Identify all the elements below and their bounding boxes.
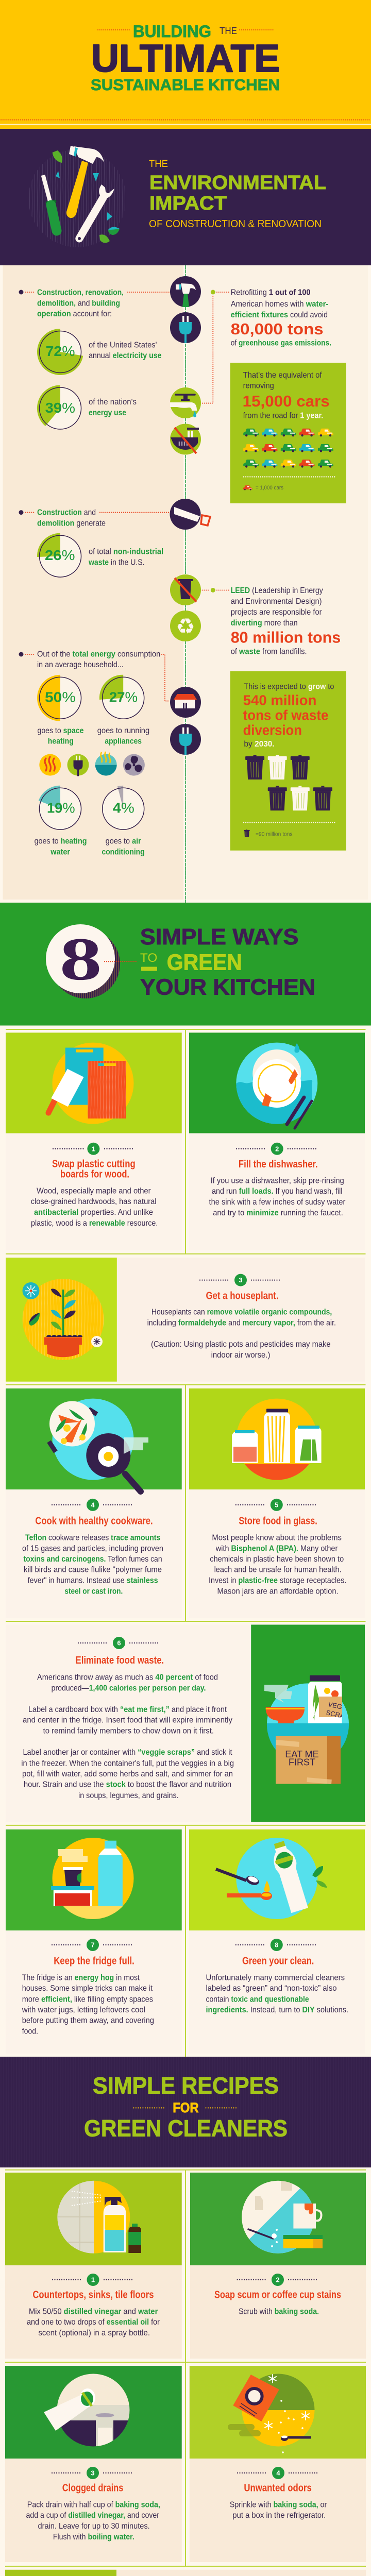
illustration: eat me first box: SCRAPS: [325, 1708, 354, 1722]
body text: Wood, especially maple and other: [37, 1187, 151, 1195]
pie chart: 72 percent: 72%: [46, 343, 75, 359]
pie chart: 26 percent: [37, 533, 81, 577]
callout: demolition waste: demolition generate: [37, 519, 106, 528]
body text: and center in the fridge. Insert food that will expire imminently: [23, 1716, 232, 1725]
body text: steel or cast iron.: [64, 1587, 123, 1596]
heading: Keep the fridge full.: [54, 1956, 134, 1967]
body text: and run full loads. If you hand wash, fill: [212, 1187, 342, 1196]
icon: house circle: [170, 687, 201, 718]
panel: environmental impact header: [0, 129, 371, 265]
body text: and try to minimize running the faucet.: [213, 1209, 343, 1217]
panel: eight ways list: [0, 1026, 371, 2057]
pie chart: 27 percent: 27%: [109, 689, 138, 705]
heading: for: FOR: [173, 2100, 199, 2115]
text: electricity use: [89, 341, 162, 360]
callout: demolition waste: [19, 509, 168, 528]
body text: and one to two drops of essential oil for: [27, 2318, 160, 2327]
title line: building the: BUILDING: [133, 22, 211, 41]
panel: 540 million tons: tons of waste: [243, 707, 328, 723]
callout: LEED projects: LEED (Leadership in Energy: [231, 586, 323, 595]
body text: Sprinkle with baking soda, or: [230, 2500, 327, 2509]
illustration: eat me first box: EAT ME: [285, 1749, 319, 1759]
panel: timeline statistics: [0, 265, 371, 903]
body text: with water jugs, letting leftovers cool: [22, 2006, 145, 2014]
icon: plug small: [67, 754, 89, 776]
illustration: plant: [23, 1279, 104, 1360]
title line: building the: THE: [220, 26, 237, 36]
panel: 15000 cars: That's the equivalent of: [243, 371, 322, 380]
panel: 540 million tons: diversion: [243, 722, 302, 738]
card: houseplant: [6, 1258, 365, 1382]
body text: houses. Some simple tricks can make it: [22, 1984, 153, 1993]
text: non-industrial waste: [88, 548, 163, 567]
number badge 3: [200, 1274, 281, 1286]
body text: add a cup of distilled vinegar, and cover: [26, 2511, 160, 2520]
illustration: eat me first box: [264, 1675, 355, 1784]
number badge 8: 8: [275, 1941, 278, 1949]
number badge 1: [53, 1143, 134, 1155]
body text: Mason jars are an affordable option.: [217, 1587, 339, 1596]
body text: [22, 1973, 154, 2036]
body text: The fridge is an energy hog in most: [22, 1973, 140, 1982]
number badge 4: 4: [276, 2469, 280, 2477]
callout: retrofitting homes: [203, 288, 331, 403]
heading: Soap scum or coffee cup stains: [214, 2290, 341, 2301]
callout: retrofitting homes: efficient fixtures could avoid: [231, 311, 328, 319]
pie chart: 39 percent: [37, 385, 81, 429]
body text: Most people know about the problems: [212, 1534, 342, 1543]
text: air conditioning: conditioning: [102, 848, 145, 856]
body text: kill birds and cause flulike "polymer fume: [24, 1566, 162, 1574]
illustration: mug and sponge: [240, 2179, 323, 2257]
callout: retrofitting homes: of greenhouse gas emissions.: [231, 338, 331, 347]
illustration: cleaning supplies: [216, 1838, 327, 1919]
panel: 540 million tons: by 2030.: [244, 740, 275, 749]
number badge 7: [52, 1939, 133, 1951]
body text: [22, 1534, 163, 1596]
text: energy use: of the nation's: [89, 398, 137, 406]
panel: 540 million tons: 540 million: [243, 692, 316, 708]
heading: Get a houseplant.: [206, 1291, 278, 1302]
body text: Americans throw away as much as 40 percent of food: [37, 1673, 218, 1682]
body text: put a box in the refrigerator.: [232, 2511, 326, 2520]
heading: your kitchen: YOUR KITCHEN: [140, 975, 315, 1000]
pie chart: 50 percent: 50%: [45, 689, 76, 705]
pie chart: 19 percent: [39, 786, 81, 829]
number badge 2: [237, 1143, 318, 1155]
body text: Houseplants can remove volatile organic compounds,: [151, 1308, 332, 1317]
illustration: plate and pan: [49, 1399, 148, 1492]
body text: [209, 1534, 346, 1596]
panel: recipes list: [0, 2167, 371, 2576]
text: energy use: [89, 398, 137, 417]
panel: 15000 cars: from the road for 1 year.: [243, 412, 323, 420]
body text: produced—1,400 calories per person per day.: [52, 1684, 206, 1693]
body text: hour. Strain and use the stock to boost the flavor and nutrition: [24, 1781, 231, 1789]
panel: 540 million tons: [230, 671, 346, 851]
number badge 7: 7: [91, 1941, 95, 1949]
legend: car: = 1,000 cars: [256, 485, 283, 491]
heading: simple recipes: SIMPLE RECIPES: [93, 2072, 279, 2098]
body text: food.: [22, 2027, 38, 2036]
heading: Cook with healthy cookware.: [35, 1515, 153, 1527]
text: space heating: goes to space: [37, 726, 84, 735]
body text: (Caution: Using plastic pots and pesticides may make: [151, 1340, 331, 1349]
recipe card 3: [5, 2366, 182, 2562]
panel: title header: [0, 0, 371, 129]
callout: household energy: [19, 650, 169, 701]
panel: 8 simple ways header: [0, 903, 371, 1026]
pie chart: 26 percent: 26%: [45, 547, 75, 563]
callout: retrofitting homes: 80,000 tons: [231, 320, 324, 338]
icon: factory circle: [170, 423, 201, 454]
body text: close-grained hardwoods, has natural: [31, 1197, 157, 1206]
heading: environmental impact: [149, 172, 326, 214]
icon: plug circle two: [170, 724, 201, 755]
body text: Invest in plastic-free storage receptacles.: [209, 1577, 346, 1585]
body text: plastic, wood is a renewable resource.: [31, 1219, 158, 1228]
illustration: spray bottle: [57, 2179, 141, 2257]
callout: construction operation share: Construction, renovation,: [37, 288, 124, 297]
body text: [206, 1973, 348, 2014]
text: energy use: energy use: [89, 409, 126, 417]
panel: 540 million tons: This is expected to grow to: [244, 682, 334, 691]
number badge 2: 2: [275, 1145, 279, 1153]
body text: [26, 2500, 160, 2541]
body text: labeled as “green” and “non-toxic” also: [206, 1984, 337, 1993]
callout: retrofitting homes: Retrofitting 1 out of 100: [231, 288, 311, 297]
body text: Label another jar or container with “veggie scraps” and stick it: [23, 1748, 232, 1757]
pie chart: 39 percent: 39%: [45, 400, 75, 416]
panel: 15000 cars: 15,000 cars: [243, 392, 330, 410]
text: non-industrial waste: of total non-industrial: [89, 548, 163, 556]
callout: LEED projects: diverting more than: [231, 619, 298, 628]
icon: saw circle: [170, 499, 210, 530]
card: dishwasher: [189, 1032, 365, 1217]
body text: toxins and carcinogens. Teflon fumes can: [24, 1555, 162, 1564]
pictogram: cars: [243, 429, 333, 468]
number badge 3: 3: [91, 2469, 95, 2477]
number badge 5: [236, 1499, 317, 1511]
panel: 15000 cars: removing: [243, 382, 274, 391]
callout: LEED projects: of waste from landfills.: [231, 647, 307, 656]
heading: environmental impact: ENVIRONMENTAL: [149, 172, 326, 194]
heading: Clogged drains: [62, 2482, 123, 2494]
body text: Scrub with baking soda.: [239, 2307, 319, 2316]
recipe card 2: [190, 2173, 366, 2359]
illustration: cutting boards: [48, 1043, 134, 1124]
body text: [31, 1187, 158, 1228]
body text: chemicals in plastic have been shown to: [210, 1555, 344, 1564]
pie chart: 72 percent: [37, 329, 83, 375]
text: electricity use: of the United States': [89, 341, 157, 349]
callout: LEED projects: and Environmental Design): [231, 597, 322, 606]
text: electricity use: annual electricity use: [89, 351, 162, 360]
number badge 2: 2: [276, 2276, 280, 2284]
body text: of 15 gases and particles, including proven: [22, 1544, 163, 1553]
icon: trash circle: [170, 574, 201, 605]
illustration: jars: [232, 1399, 322, 1482]
heading: simple ways: SIMPLE WAYS: [140, 924, 299, 950]
illustration: fridge items: [51, 1838, 137, 1922]
body text: Unfortunately many commercial cleaners: [206, 1973, 345, 1982]
body text: scent (optional) in a spray bottle.: [38, 2329, 150, 2337]
text: running appliances: goes to running: [97, 726, 149, 735]
illustration: eat me first box: FIRST: [289, 1757, 315, 1767]
number badge 6: [78, 1637, 160, 1649]
number badge 8: [236, 1939, 317, 1951]
callout: construction operation share: demolition, and building: [37, 299, 120, 308]
callout: construction operation share: [19, 288, 169, 318]
illustration: eat me first box: VEGGIE: [327, 1700, 355, 1713]
text: heating water: water: [50, 848, 70, 856]
callout: demolition waste: Construction and: [37, 509, 96, 517]
card: green your clean: [189, 1829, 365, 2054]
panel: 15000 cars: [230, 363, 346, 503]
text: space heating: heating: [48, 737, 74, 746]
card: glass storage: [189, 1388, 365, 1618]
callout: retrofitting homes: American homes with water-: [231, 300, 328, 309]
number badge 3: [52, 2467, 133, 2479]
icon: fan: [123, 754, 145, 776]
body text: drain. Leave for up to 30 minutes.: [38, 2522, 150, 2531]
pictogram: trash cans: [245, 755, 332, 810]
icon: plug circle: [170, 312, 201, 343]
body text: ingredients. Instead, turn to DIY solutions.: [206, 2006, 348, 2014]
body text: [147, 1308, 336, 1360]
illustration: clogged drain: [44, 2372, 131, 2449]
body text: before putting them away, and covering: [22, 2016, 154, 2025]
body text: in soups, legumes, and grains.: [78, 1791, 179, 1800]
heading: green cleaners: GREEN CLEANERS: [84, 2115, 288, 2141]
legend: car: [243, 485, 283, 491]
body text: Pack drain with half cup of baking soda,: [27, 2500, 160, 2509]
card: healthy cookware: [6, 1388, 182, 1618]
body text: indoor air worse.): [211, 1351, 270, 1360]
number badge 1: [53, 2274, 134, 2286]
icon: heat waves: [39, 754, 61, 776]
number badge 4: [52, 1499, 133, 1511]
heading: Green your clean.: [242, 1956, 314, 1967]
body text: [230, 2500, 327, 2520]
legend: trash can: [244, 829, 293, 837]
pie chart: 4 percent: [103, 786, 144, 829]
heading: to green: GREEN: [167, 950, 242, 975]
body text: the sink with a few inches of sudsy water: [209, 1198, 346, 1207]
body text: to remind family members to chow down on it first.: [43, 1726, 214, 1735]
heading: Swap plastic cutting: [52, 1158, 136, 1170]
body text: more efficient, like filling empty spaces: [22, 1995, 153, 2004]
body text: [27, 2307, 160, 2337]
icon: tools: [28, 146, 126, 247]
recipe card 4: [190, 2366, 366, 2562]
body text: [209, 1176, 346, 1217]
text: heating water: [35, 837, 87, 856]
body text: Teflon cookware releases trace amounts: [25, 1534, 160, 1543]
text: space heating: [37, 726, 84, 746]
body text: If you use a dishwasher, skip pre-rinsing: [211, 1176, 344, 1185]
icon: water heating: [95, 752, 117, 776]
pie chart: 50 percent: [37, 675, 81, 721]
body text: Flush with boiling water.: [53, 2533, 134, 2541]
body text: leach and be unsafe for human health.: [214, 1566, 342, 1574]
icon: number eight disc: [46, 924, 120, 998]
text: running appliances: [97, 726, 149, 746]
card: food waste: [6, 1625, 365, 1822]
pie chart: 27 percent: [99, 675, 144, 719]
title line: sustainable kitchen: SUSTAINABLE KITCHEN: [91, 76, 280, 94]
heading: the: THE: [149, 159, 168, 170]
body text: antibacterial properties. And unlike: [34, 1208, 153, 1217]
number badge 1: 1: [92, 1145, 95, 1153]
heading: Unwanted odors: [244, 2482, 312, 2494]
body text: pot, fill with water, add some herbs and salt, and simmer for an: [22, 1770, 233, 1778]
callout: construction operation share: operation account for:: [37, 310, 112, 318]
text: non-industrial waste: waste in the U.S.: [88, 558, 145, 567]
icon: recycle circle: [170, 611, 201, 641]
recipe card 5: microwave: [5, 2570, 366, 2576]
illustration: plates: [234, 1043, 317, 1128]
number badge 3: 3: [239, 1276, 243, 1284]
heading: Countertops, sinks, tile floors: [32, 2290, 154, 2301]
callout: LEED projects: projects are responsible for: [231, 608, 322, 617]
heading: boards for wood.: [60, 1168, 129, 1180]
number badge 2: [238, 2274, 318, 2286]
body text: including formaldehyde and mercury vapor, from the air.: [147, 1318, 336, 1327]
icon: recycle circle: ♻: [176, 614, 195, 639]
legend: trash can: =90 million tons: [256, 831, 293, 837]
heading: environmental impact: IMPACT: [149, 193, 227, 214]
text: air conditioning: [102, 837, 145, 856]
body text: [21, 1673, 234, 1800]
title: ultimate: ULTIMATE: [91, 37, 280, 80]
callout: household energy: Out of the total energy consumption: [37, 650, 160, 658]
icon: faucet circle: [170, 387, 201, 418]
heading: Store food in glass.: [239, 1515, 317, 1527]
number badge 4: 4: [91, 1501, 95, 1509]
number badge 5: 5: [275, 1501, 278, 1509]
callout: household energy: in an average household...: [37, 660, 124, 669]
heading: of construction and renovation: OF CONSTRUCTION & RENOVATION: [149, 218, 322, 230]
body text: contain toxic and questionable: [206, 1995, 309, 2004]
heading: Eliminate food waste.: [75, 1655, 164, 1666]
heading: to green: TO: [140, 951, 157, 965]
pie chart: 19 percent: 19%: [47, 800, 75, 816]
number badge 6: 6: [117, 1639, 121, 1647]
number badge 4: [238, 2467, 319, 2479]
heading: [52, 1158, 136, 1180]
body text: in the freezer. When the container's full, put the veggies in a big: [21, 1759, 234, 1768]
pie chart: 4 percent: 4%: [113, 800, 134, 816]
card: cutting boards: [6, 1032, 182, 1250]
callout: LEED projects: 80 million tons: [231, 629, 341, 647]
panel: simple recipes header: [0, 2057, 371, 2167]
number badge 1: 1: [91, 2276, 95, 2284]
text: heating water: goes to heating: [35, 837, 87, 846]
body text: with Bisphenol A (BPA). Many other: [215, 1544, 338, 1553]
body text: Mix 50/50 distilled vinegar and water: [29, 2307, 158, 2316]
card: keep fridge full: [6, 1829, 182, 2054]
callout: LEED projects: [203, 586, 341, 656]
icon: hammer circle: [170, 276, 201, 307]
body text: fever" in humans. Instead use stainless: [28, 1577, 158, 1585]
text: running appliances: appliances: [105, 737, 142, 746]
text: air conditioning: goes to air: [106, 837, 141, 846]
body text: Label a cardboard box with “eat me first,” and place it front: [28, 1705, 227, 1714]
heading: Fill the dishwasher.: [239, 1159, 318, 1170]
illustration: baking soda box: [228, 2372, 317, 2453]
icon: number eight disc: 8: [60, 925, 102, 993]
recipe card 1: [5, 2173, 182, 2359]
